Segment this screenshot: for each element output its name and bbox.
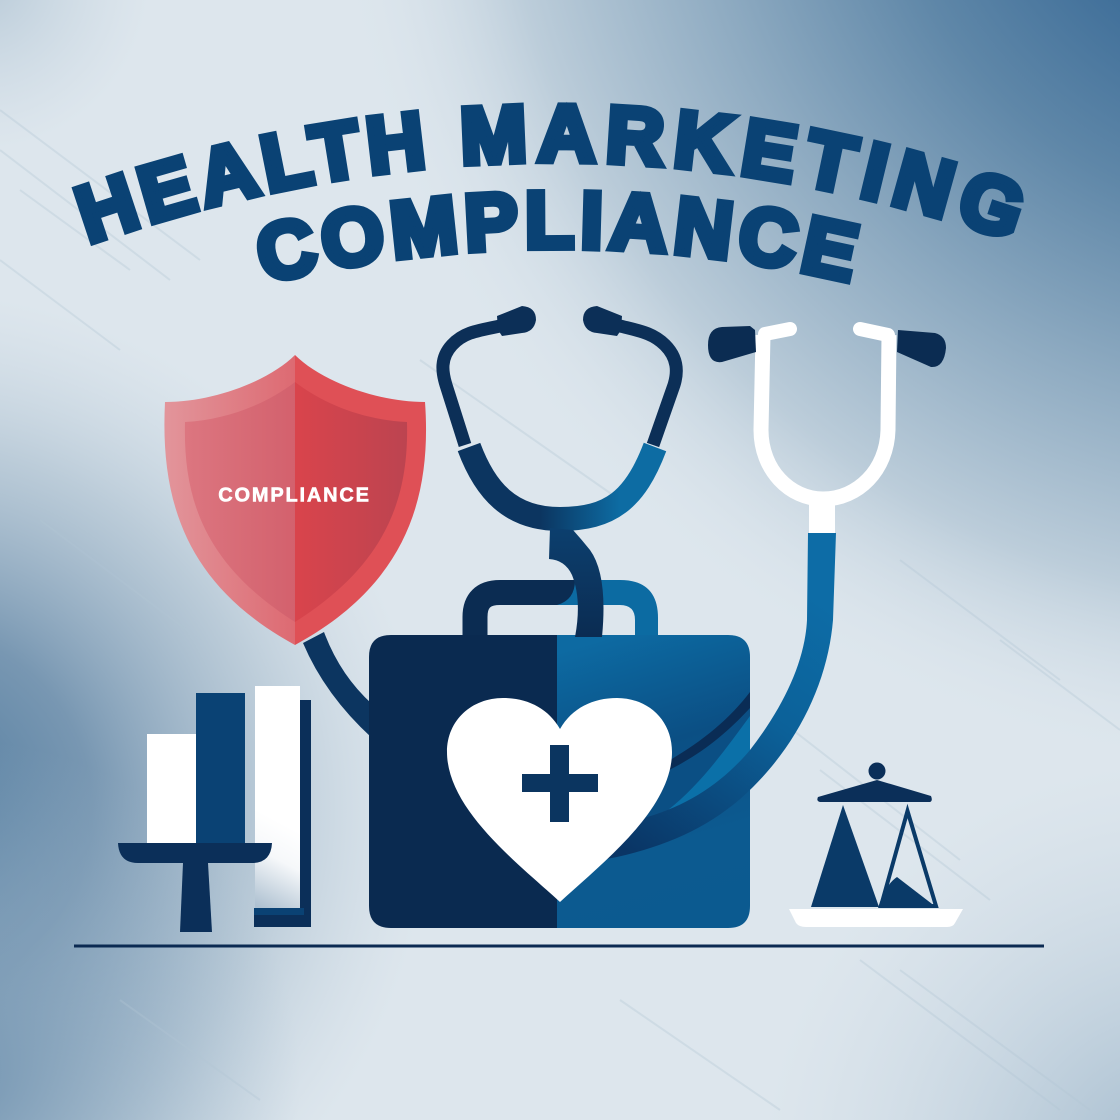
- icon: briefcase: [369, 580, 750, 928]
- icon: dark stethoscope: [443, 306, 676, 637]
- shield label: COMPLIANCE: [218, 484, 371, 506]
- title line 1: HEALTH MARKETING: [72, 102, 1024, 246]
- icon: balance scale: [789, 762, 963, 927]
- title line 2: COMPLIANCE: [256, 189, 862, 285]
- tube from shield to case: [303, 632, 372, 738]
- floor line: [74, 944, 1044, 948]
- title: [72, 102, 1024, 285]
- icon: shield: [164, 355, 426, 645]
- bar chart on stand: [118, 686, 311, 932]
- stethoscope tube crossing case: [590, 533, 836, 862]
- icon: heart with plus: [447, 698, 672, 902]
- icon: white stethoscope head: [708, 326, 946, 535]
